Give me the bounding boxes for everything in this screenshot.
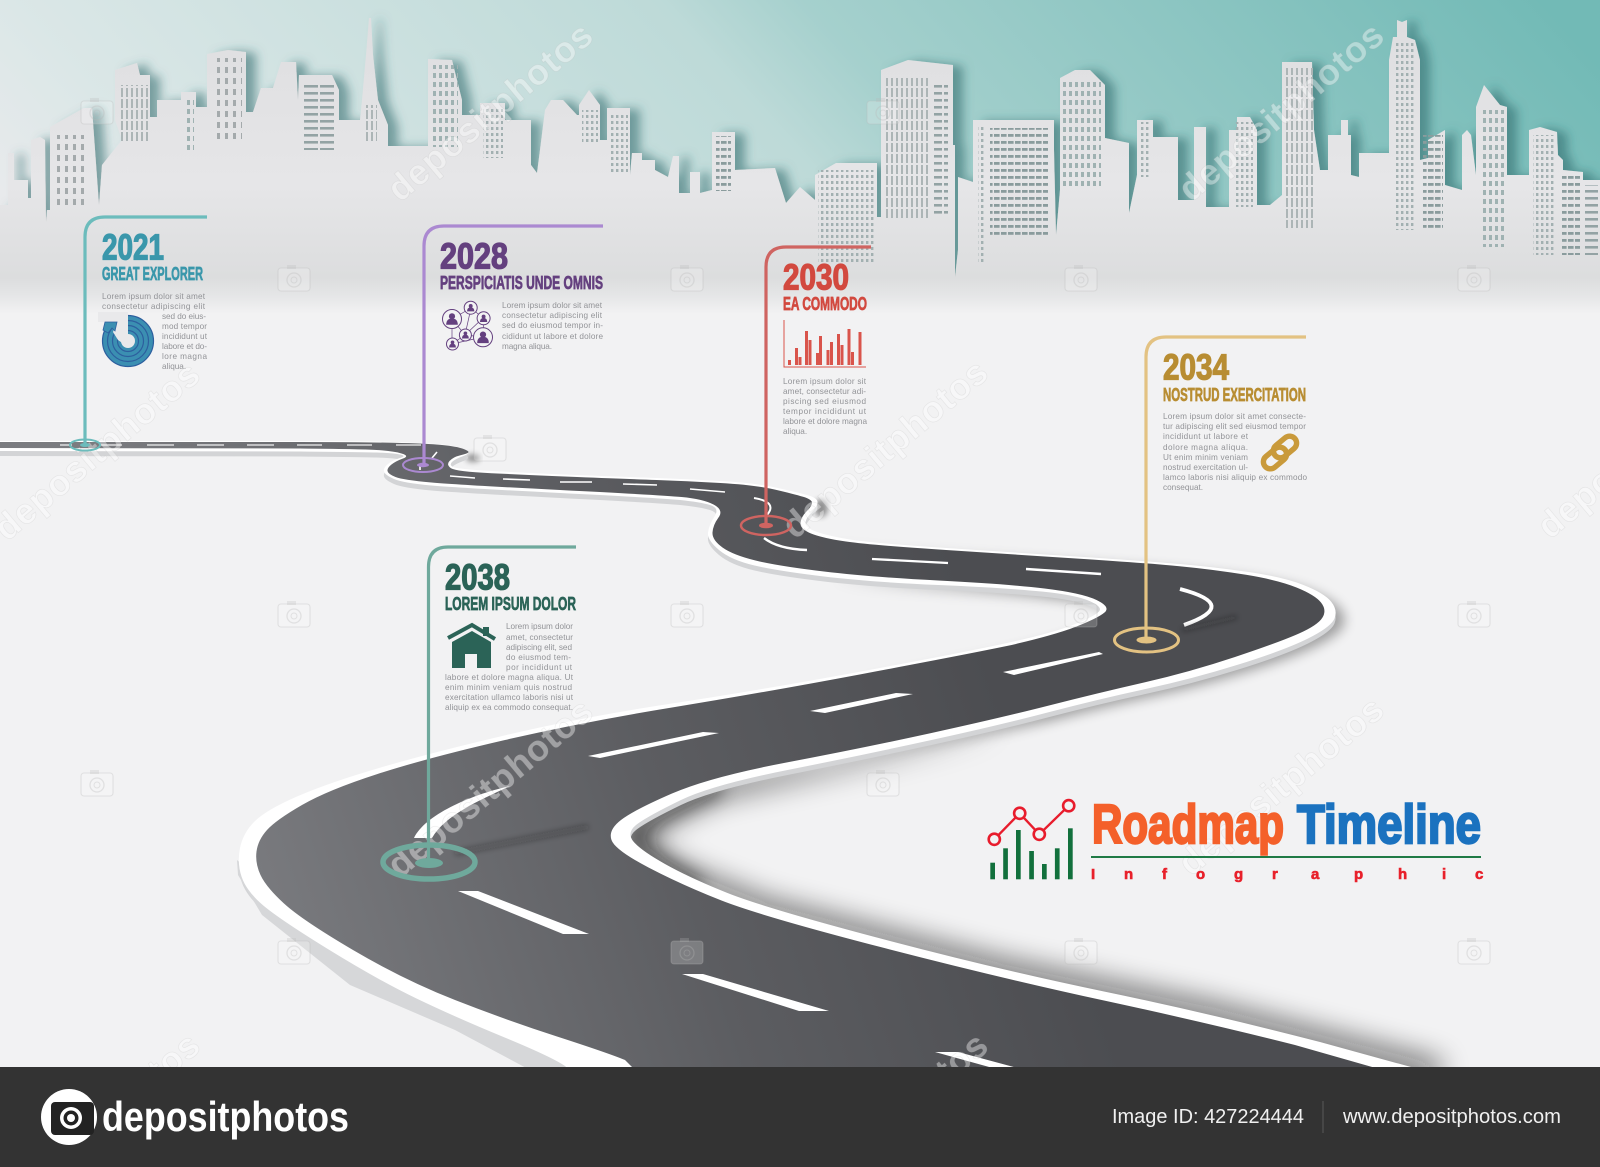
2030 body text: piscing sed eiusmod: [783, 397, 866, 406]
2038 year: 2038: [445, 556, 510, 598]
2028 year: 2028: [440, 236, 508, 276]
2034 body text: [1163, 412, 1307, 492]
watermark text: depositphotos: [379, 14, 601, 209]
2038 body text: enim minim veniam quis nostrud: [445, 683, 572, 692]
2030 body text: amet, consectetur adi-: [783, 387, 866, 396]
2028 body text: cididunt ut labore et dolore: [502, 332, 603, 341]
paper-cut city skyline: [0, 18, 1600, 320]
title block: roadmap timeline infographic: [989, 793, 1483, 883]
2021 body text: consectetur adipiscing elit: [102, 302, 206, 311]
2034 body text: consequat.: [1163, 483, 1203, 492]
watermark text: depositphotos: [1170, 688, 1392, 883]
2030 body text: [783, 377, 867, 436]
2038 pin and flag line: [383, 547, 576, 879]
lower ground background: [0, 316, 1600, 1076]
2030 body text: Lorem ipsum dolor sit: [783, 377, 867, 386]
subtitle: Infographic: Infographic: [1091, 866, 1483, 883]
2028 body text: magna aliqua.: [502, 342, 552, 351]
2034 body text: nostrud exercitation ul-: [1163, 463, 1248, 472]
near road side wall: [237, 860, 600, 1070]
2038 body text: amet, consectetur: [506, 633, 573, 642]
2021 body text: sed do eius-: [162, 312, 206, 321]
road white border: [0, 441, 1440, 1075]
2038 body text: [445, 622, 574, 712]
website: www.depositphotos.com: [1342, 1105, 1561, 1128]
2028 pin and flag line: [403, 226, 603, 472]
2038 body text: adipiscing elit, sed: [506, 643, 572, 652]
2028 heading: PERSPICIATIS UNDE OMNIS: [440, 273, 603, 293]
title text: Roadmap: Roadmap: [1092, 793, 1284, 855]
2021 body text: aliqua.: [162, 362, 186, 371]
2030 body text: labore et dolore magna: [783, 417, 867, 426]
2034 pin and flag line: [1114, 337, 1306, 652]
icon: chart logo: [989, 800, 1074, 879]
road lane dashes: [414, 652, 1103, 1070]
2021 body text: labore et do-: [162, 342, 207, 351]
depositphotos logo: depositphotos: [102, 1093, 349, 1140]
milestone 2021: great explorer: [70, 217, 208, 450]
watermark text: depositphotos: [1170, 14, 1392, 209]
pin shadows on road: [455, 617, 1237, 853]
2028 body text: Lorem ipsum dolor sit amet: [502, 301, 603, 310]
2030 body text: aliqua.: [783, 427, 807, 436]
road shadow: right bend: [868, 551, 1417, 1067]
2021 body text: Lorem ipsum dolor sit amet: [102, 292, 206, 301]
depositphotos logo: [41, 1089, 349, 1145]
2021 year: 2021: [102, 226, 164, 268]
faint watermark camera icons: [81, 98, 1490, 964]
2034 body text: incididunt ut labore et: [1163, 432, 1249, 441]
2021 body text: lore magna: [162, 352, 207, 361]
2030 year: 2030: [783, 256, 849, 298]
2034 body text: Lorem ipsum dolor sit amet consecte-: [1163, 412, 1306, 421]
2038 body text: Lorem ipsum dolor: [506, 622, 573, 631]
2034 heading: NOSTRUD EXERCITATION: [1163, 385, 1306, 405]
2021 heading: GREAT EXPLORER: [102, 264, 203, 284]
title text: Timeline: Timeline: [1297, 793, 1481, 855]
2021 pin and flag line: [70, 217, 207, 450]
milestone 2034: nostrud exercitation: [1114, 337, 1307, 652]
road shadow: inner bend lower edge: [632, 726, 1440, 1072]
road asphalt: [0, 442, 1400, 1075]
image id: Image ID: 427224444: [1112, 1105, 1304, 1128]
road shadow: small bump: [466, 454, 480, 462]
2028 body text: consectetur adipiscing elit: [502, 311, 603, 320]
watermark text: depositphotos: [774, 351, 996, 546]
2038 body text: por incididunt ut: [506, 663, 573, 672]
2038 body text: do eiusmod tem-: [506, 653, 571, 662]
icon: people network: [442, 301, 492, 350]
icon: chain link: [1261, 433, 1299, 472]
2034 body text: dolore magna aliqua.: [1163, 443, 1248, 452]
2034 year: 2034: [1163, 346, 1229, 388]
road side wall: [0, 446, 1440, 1080]
2030 pin and flag line: [741, 247, 871, 535]
road: [0, 441, 1449, 1082]
2028 body text: sed do eiusmod tempor in-: [502, 321, 603, 330]
2038 body text: exercitation ullamco laboris nisi ut: [445, 693, 574, 702]
road shadow: second bump: [814, 499, 828, 517]
2030 body text: tempor incididunt ut: [783, 407, 867, 416]
2021 body text: [102, 292, 208, 371]
2021 body text: mod tempor: [162, 322, 207, 331]
2038 body text: labore et dolore magna aliqua. Ut: [445, 673, 574, 682]
milestone 2038: lorem ipsum dolor: [383, 547, 576, 879]
icon: spiral arrow target: [98, 312, 154, 366]
2028 body text: [502, 301, 603, 351]
2034 body text: lamco laboris nisi aliquip ex commodo: [1163, 473, 1307, 482]
watermark text: depositphotos: [379, 690, 601, 885]
2021 body text: incididunt ut: [162, 332, 208, 341]
bar chart: [784, 320, 866, 367]
footer banner: [0, 1067, 1600, 1167]
milestone 2028: perspiciatis unde omnis: [403, 226, 603, 472]
milestone 2030: ea commodo: [741, 247, 871, 535]
2030 heading: EA COMMODO: [783, 294, 867, 314]
sky background: [0, 0, 1600, 330]
2034 body text: tur adipiscing elit sed eiusmod tempor: [1163, 422, 1306, 431]
2038 body text: aliquip ex ea commodo consequat.: [445, 703, 573, 712]
icon: house: [448, 625, 495, 668]
title underline: [1091, 856, 1481, 858]
2034 body text: Ut enim minim veniam: [1163, 453, 1248, 462]
2038 heading: LOREM IPSUM DOLOR: [445, 594, 576, 614]
road shadow: inner bend apex: [632, 786, 720, 888]
